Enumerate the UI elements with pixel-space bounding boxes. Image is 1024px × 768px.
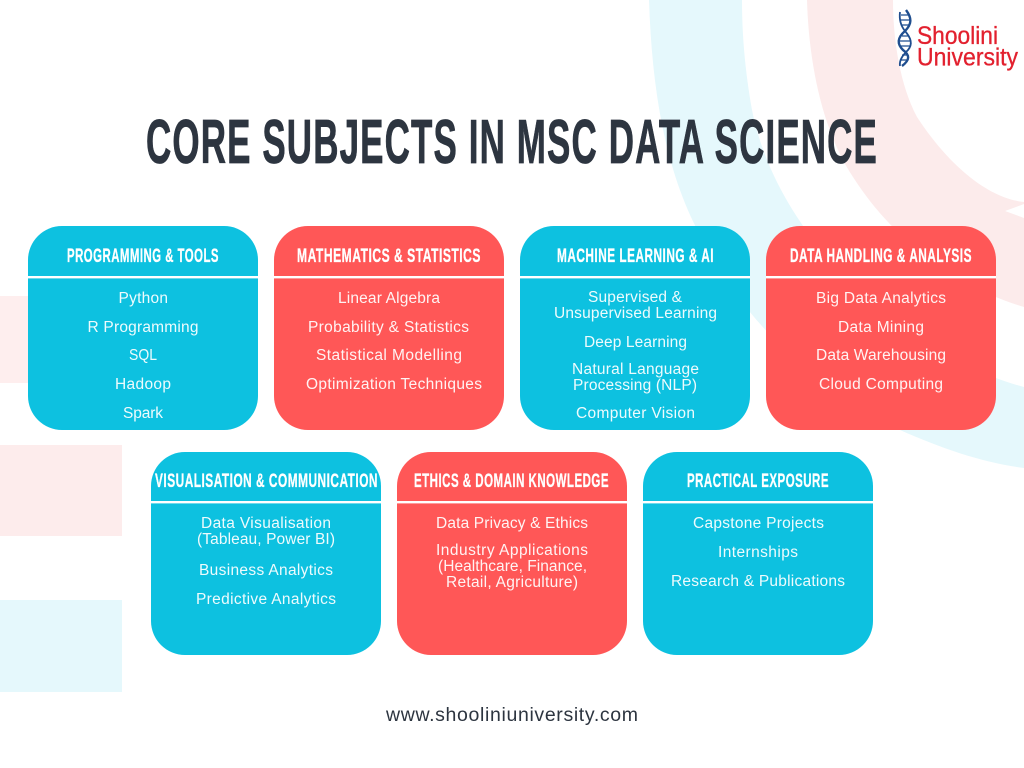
panel: ethics and domain knowledge (397, 452, 627, 655)
heading: PRACTICAL EXPOSURE (687, 471, 829, 492)
panel: programming and tools (28, 226, 258, 430)
list: (Tableau, Power BI) (197, 531, 335, 548)
heading: MACHINE LEARNING & AI (557, 246, 714, 267)
list: Spark (123, 405, 163, 422)
list (306, 290, 482, 393)
list: R Programming (88, 319, 198, 336)
list: Internships (718, 544, 798, 561)
list: Hadoop (115, 376, 171, 393)
list: Cloud Computing (819, 376, 943, 393)
list: Data Mining (838, 319, 924, 336)
list: Processing (NLP) (573, 377, 697, 394)
list: Big Data Analytics (816, 290, 946, 307)
background: pink arc (807, 0, 1024, 307)
list: Predictive Analytics (196, 591, 336, 608)
list: Data Privacy & Ethics (436, 515, 588, 532)
panel: machine learning and AI (520, 226, 750, 430)
panel: visualisation and communication (151, 452, 381, 655)
list (816, 290, 946, 393)
list (554, 289, 717, 422)
panel: data handling and analysis (766, 226, 996, 430)
background: left pink block upper (0, 296, 40, 383)
background: left pink block lower (0, 445, 122, 536)
heading: VISUALISATION & COMMUNICATION (155, 471, 378, 492)
heading: ETHICS & DOMAIN KNOWLEDGE (414, 471, 609, 492)
background: left cyan block (0, 600, 122, 692)
list (196, 515, 336, 608)
list (671, 515, 845, 590)
list: Industry Applications (436, 542, 588, 559)
list: Retail, Agriculture) (446, 574, 578, 591)
heading: MATHEMATICS & STATISTICS (297, 246, 481, 267)
list: Probability & Statistics (308, 319, 469, 336)
list: Linear Algebra (338, 290, 440, 307)
list: Business Analytics (199, 562, 333, 579)
list (88, 290, 198, 422)
list: Natural Language (572, 361, 699, 378)
website footer: www.shooliniuniversity.com (385, 704, 638, 726)
list: Python (118, 290, 168, 307)
list (436, 515, 588, 591)
panel: mathematics and statistics (274, 226, 504, 430)
logo: Shoolini University (899, 10, 1018, 72)
list: SQL (129, 347, 157, 364)
list: Research & Publications (671, 573, 845, 590)
list: Supervised & (588, 289, 683, 306)
list: Optimization Techniques (306, 376, 482, 393)
background: cyan arc (649, 0, 1024, 468)
icon: DNA helix (899, 10, 911, 66)
logo text: Shoolini (917, 22, 998, 50)
list: Computer Vision (576, 405, 695, 422)
panel: practical exposure (643, 452, 873, 655)
list: Statistical Modelling (316, 347, 462, 364)
list: (Healthcare, Finance, (438, 558, 587, 575)
list: Capstone Projects (693, 515, 824, 532)
heading: PROGRAMMING & TOOLS (67, 246, 219, 267)
logo: Shoolini University: University (917, 44, 1018, 72)
list: Data Warehousing (816, 347, 946, 364)
list: Unsupervised Learning (554, 305, 717, 322)
list: Data Visualisation (201, 515, 331, 532)
list: Deep Learning (584, 334, 687, 351)
